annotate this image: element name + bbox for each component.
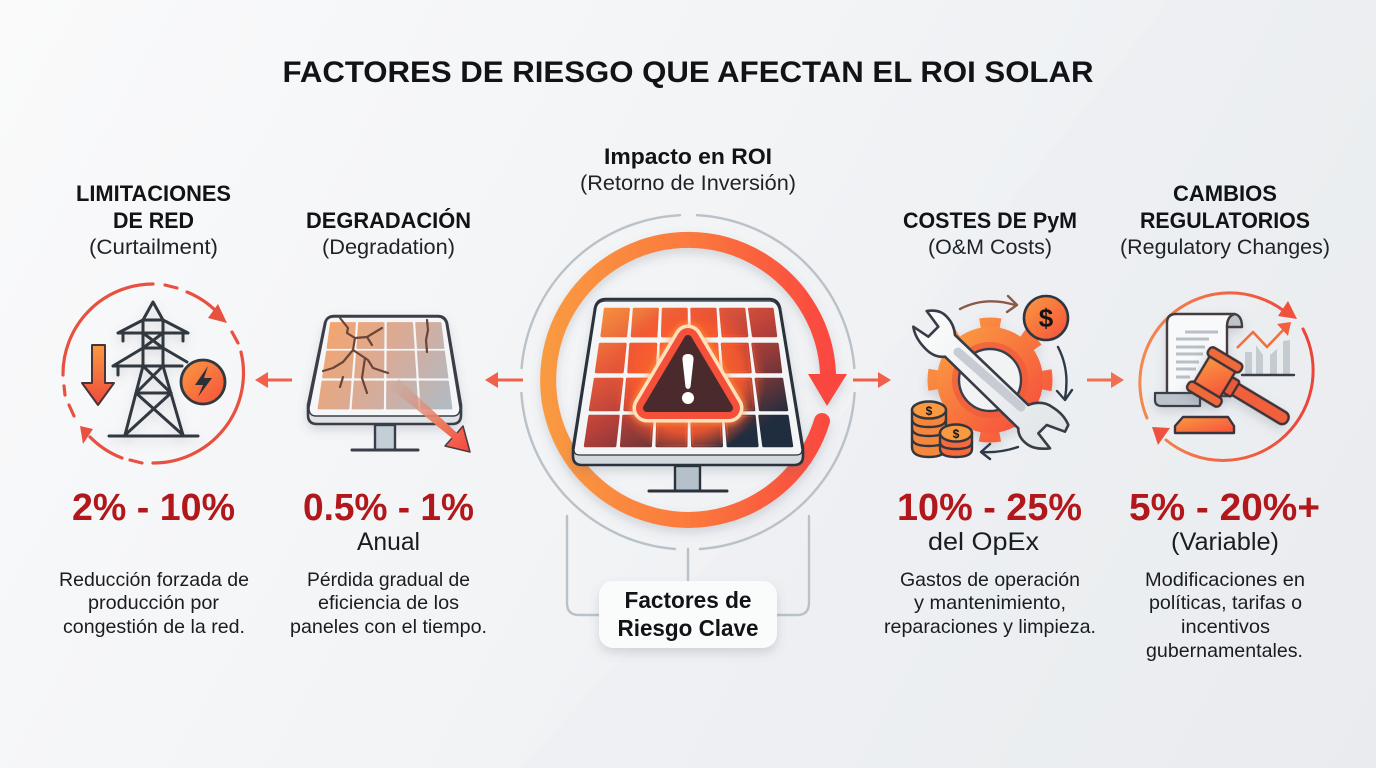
description: degradacion: eficiencia de los: [318, 592, 459, 614]
heading: limitaciones de red: (Curtailment): [89, 236, 218, 259]
description: costes de PyM: y mantenimiento,: [914, 592, 1066, 614]
icon: transmission tower: [63, 284, 243, 463]
description: costes de PyM: [884, 569, 1096, 638]
arrow: to limitaciones: [255, 372, 292, 388]
heading: costes de PyM: (O&M Costs): [928, 236, 1052, 259]
heading: degradacion: (Degradation): [322, 236, 455, 259]
heading: cambios regulatorios: [1120, 181, 1330, 259]
central orange arrow ring: [548, 240, 847, 520]
arrow: to costes: [853, 372, 891, 388]
stand: [352, 425, 418, 450]
wrench: [913, 311, 1068, 449]
coin stacks: [912, 402, 972, 457]
chart: [1237, 322, 1294, 375]
heading: impacto en ROI: Impacto en ROI: [604, 144, 772, 169]
tower structure: [109, 302, 198, 436]
dashed cycle ring: [63, 284, 243, 463]
heading: impacto en ROI: [580, 144, 796, 195]
heading: costes de PyM: COSTES DE PyM: [903, 208, 1077, 233]
stat: cambios regulatorios: 5% - 20%+: [1129, 487, 1320, 529]
stat: costes de PyM: [897, 487, 1082, 556]
cracks: [323, 318, 428, 393]
heading: impacto en ROI: (Retorno de Inversión): [580, 172, 796, 195]
label: factores de riesgo clave: Riesgo Clave: [618, 615, 758, 641]
down arrow: [82, 345, 114, 405]
description: cambios regulatorios: incentivos: [1181, 616, 1270, 638]
description: cambios regulatorios: [1145, 569, 1305, 662]
description: degradacion: [290, 569, 487, 638]
stat: degradacion: Anual: [357, 528, 420, 556]
icon: gavel, document and chart: [1140, 293, 1313, 460]
description: costes de PyM: Gastos de operación: [900, 569, 1080, 591]
warning triangle: [647, 339, 729, 408]
heading: cambios regulatorios: CAMBIOS: [1173, 181, 1277, 206]
stat: costes de PyM: del OpEx: [928, 528, 1040, 556]
heading: cambios regulatorios: REGULATORIOS: [1140, 208, 1310, 233]
icon: cracked solar panel: [308, 316, 470, 452]
stat: cambios regulatorios: [1129, 487, 1320, 556]
document: [1155, 314, 1242, 406]
description: costes de PyM: reparaciones y limpieza.: [884, 616, 1096, 638]
heading: limitaciones de red: DE RED: [113, 208, 194, 233]
panel frame: [308, 316, 461, 424]
stat: limitaciones de red: 2% - 10%: [72, 487, 235, 529]
panel cells: [318, 323, 452, 408]
icon: central solar panel with warning: [573, 299, 803, 491]
panel stand: [649, 466, 727, 491]
gavel: [1186, 346, 1300, 442]
coin stacks: $: [953, 427, 960, 441]
arrow: to cambios: [1087, 372, 1124, 388]
heading: limitaciones de red: [76, 181, 231, 259]
heading: limitaciones de red: LIMITACIONES: [76, 181, 231, 206]
arrow: to degradacion: [485, 372, 523, 388]
heading: costes de PyM: [903, 208, 1077, 259]
cycle arrows: [960, 296, 1072, 459]
label: factores de riesgo clave: [599, 581, 777, 648]
cycle ring: [1140, 293, 1313, 460]
stat: degradacion: 0.5% - 1%: [303, 487, 474, 529]
panel frame: [573, 299, 803, 465]
description: cambios regulatorios: políticas, tarifas o: [1149, 592, 1302, 614]
description: degradacion: Pérdida gradual de: [307, 569, 470, 591]
stat: costes de PyM: 10% - 25%: [897, 487, 1082, 529]
gavel base: [1175, 417, 1234, 433]
description: cambios regulatorios: Modificaciones en: [1145, 569, 1305, 591]
description: limitaciones de red: [59, 569, 249, 638]
panel glow: [585, 309, 792, 446]
stat: degradacion: [303, 487, 474, 556]
gear: [934, 324, 1046, 436]
description: limitaciones de red: Reducción forzada de: [59, 569, 249, 591]
dollar coin: $: [1039, 303, 1054, 333]
description: limitaciones de red: congestión de la red.: [63, 616, 245, 638]
heading: degradacion: DEGRADACIÓN: [306, 208, 471, 233]
label: factores de riesgo clave: Factores de: [624, 587, 752, 613]
heading: cambios regulatorios: (Regulatory Changes): [1120, 236, 1330, 259]
description: degradacion: paneles con el tiempo.: [290, 616, 487, 638]
stat: cambios regulatorios: (Variable): [1171, 528, 1279, 556]
bolt badge: [181, 360, 225, 404]
central outer gray ring and connectors: [521, 215, 855, 615]
decline arrow: [390, 379, 470, 452]
heading: degradacion: [306, 208, 471, 259]
title: FACTORES DE RIESGO QUE AFECTAN EL ROI SOLAR: [282, 56, 1094, 89]
description: cambios regulatorios: gubernamentales.: [1146, 640, 1303, 662]
panel cells: [585, 309, 792, 446]
coin stacks: $: [926, 404, 933, 418]
dollar coin: [1024, 296, 1068, 340]
icon: gear, wrench and coins: [912, 296, 1072, 459]
description: limitaciones de red: producción por: [88, 592, 220, 614]
